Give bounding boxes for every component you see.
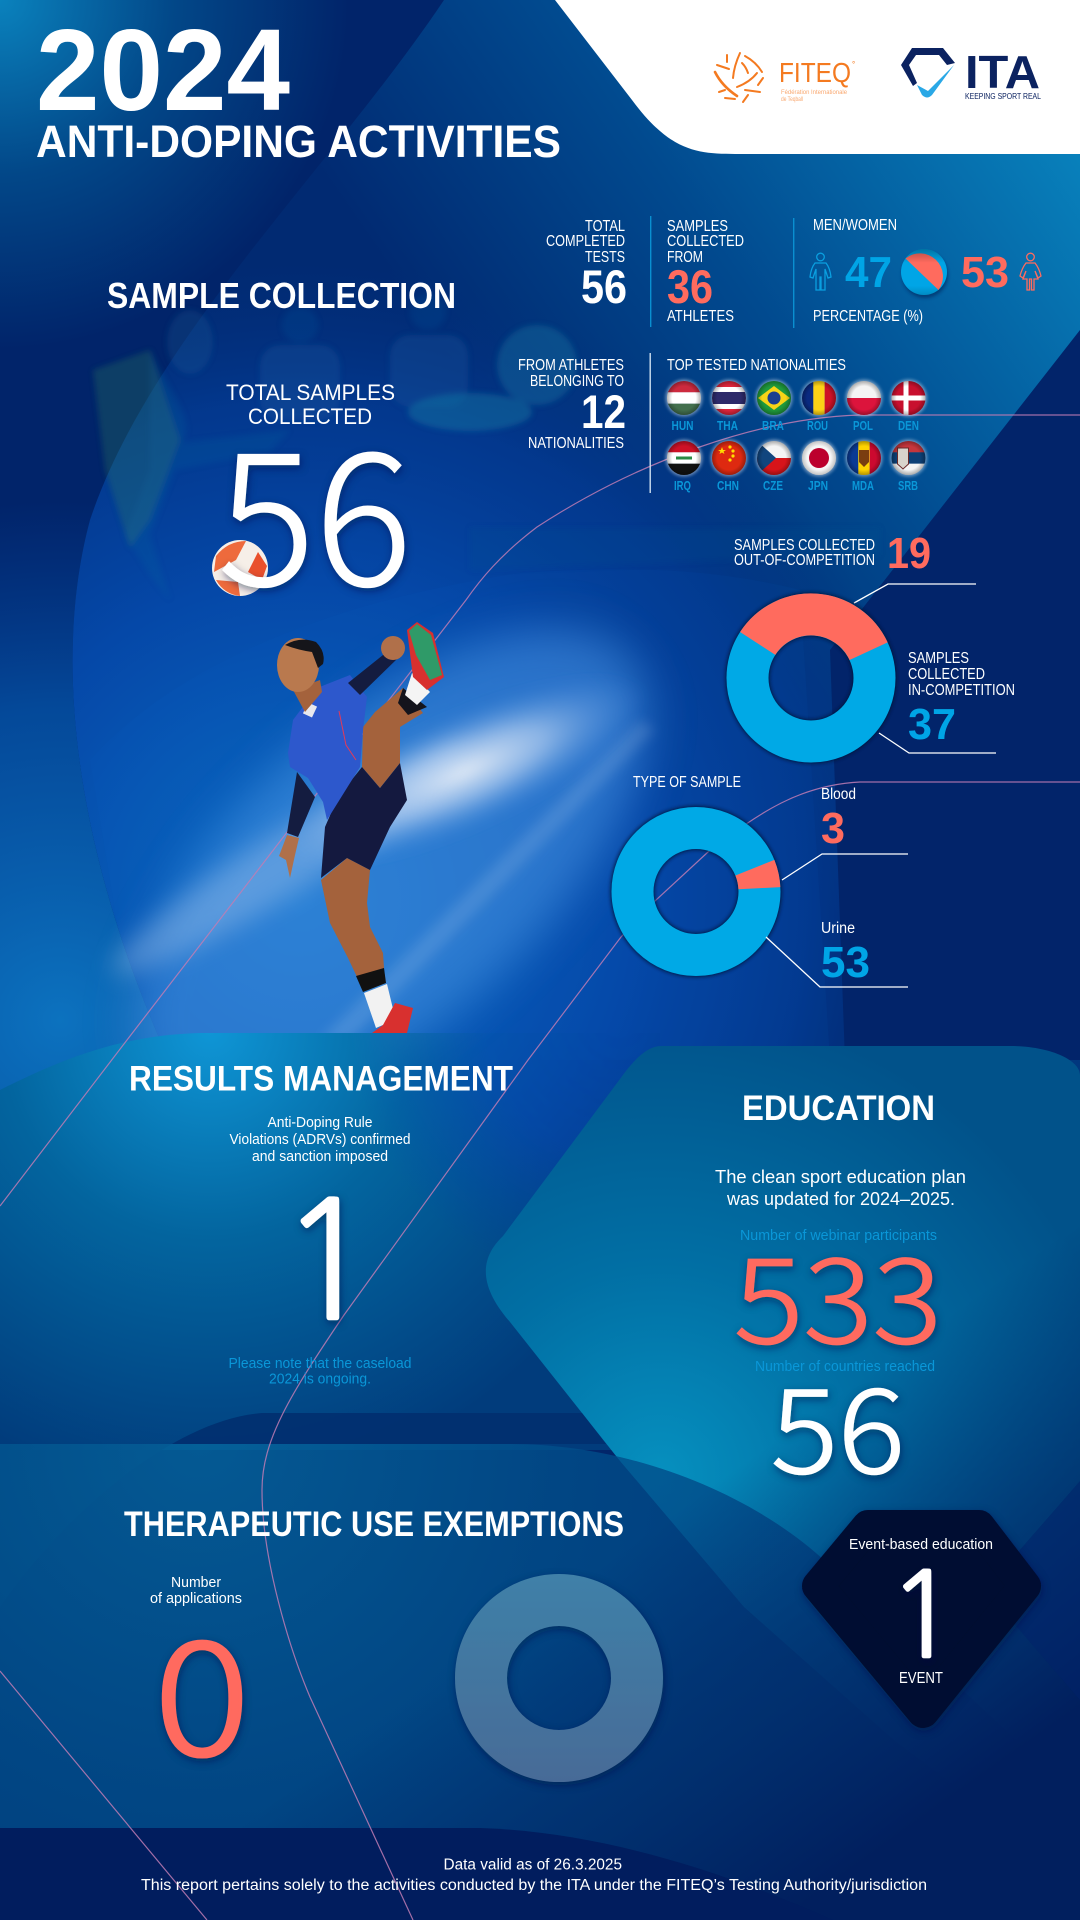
- callout: event-based education: Event-based education: [849, 1537, 993, 1553]
- therapeutic use exemptions panel background: [0, 1444, 1080, 1920]
- logo: ITA: KEEPING SPORT REAL: [965, 92, 1041, 101]
- footer note: Data valid as of 26.3.2025: [444, 1856, 622, 1874]
- icon: man: [810, 253, 831, 290]
- icon: woman: [1020, 253, 1041, 290]
- total samples collected: 56: [218, 372, 412, 638]
- text: education plan: The clean sport education plan: [715, 1166, 966, 1187]
- text: number of applications: of applications: [150, 1591, 242, 1607]
- logo: FITEQ: [715, 53, 855, 103]
- flag: Hungary: [666, 380, 702, 416]
- total samples collected: COLLECTED: [248, 404, 372, 429]
- header white corner: [555, 0, 1080, 154]
- text: ADRV description: and sanction imposed: [252, 1149, 388, 1165]
- stat: samples collected from athletes: [650, 216, 744, 327]
- callout: urine: [766, 920, 908, 987]
- callout: event-based education: 1: [887, 1556, 959, 1674]
- decorative pink curves: [0, 415, 1080, 1920]
- number: countries reached: 56: [771, 1337, 905, 1507]
- label: webinar participants: Number of webinar participants: [740, 1228, 937, 1244]
- text: education plan: [715, 1166, 966, 1209]
- stat: total completed tests: TOTAL: [585, 218, 625, 235]
- footer note: [141, 1856, 927, 1894]
- stat: nationalities count: 12: [581, 385, 626, 438]
- stat: samples collected from athletes: SAMPLES: [667, 218, 728, 235]
- stat: total completed tests: [546, 218, 627, 313]
- stat: samples collected from athletes: COLLECTED: [667, 233, 744, 250]
- faded background photo of players: [93, 294, 880, 600]
- flag: Japan: [800, 440, 838, 476]
- flag: Serbia: [890, 440, 927, 476]
- callout: blood: 3: [821, 804, 845, 853]
- stat: nationalities count: NATIONALITIES: [528, 435, 624, 452]
- heading: sample collection: SAMPLE COLLECTION: [107, 275, 456, 316]
- flag labels row two: CZE: [763, 479, 783, 493]
- flag labels row one: ROU: [807, 419, 828, 433]
- logo: FITEQ: °: [852, 60, 855, 69]
- title: ANTI-DOPING ACTIVITIES: [36, 116, 561, 167]
- footer note: This report pertains solely to the activities conducted by the ITA under the FITEQ’s Testing Authority/jurisdiction: [141, 1877, 927, 1894]
- flag labels row one: BRA: [762, 419, 784, 433]
- total samples collected: TOTAL SAMPLES: [226, 380, 395, 405]
- icon: teqball ball: [212, 540, 268, 596]
- flag labels row two: IRQ: [674, 479, 691, 493]
- flag labels row one: THA: [717, 419, 738, 433]
- note: caseload: [228, 1356, 412, 1388]
- label: countries reached: Number of countries reached: [755, 1359, 935, 1375]
- flag: Thailand: [710, 380, 748, 416]
- note: caseload: Please note that the caseload: [228, 1356, 412, 1372]
- stat: men and women percentage: [793, 217, 1041, 328]
- stat: nationalities count: FROM ATHLETES: [518, 357, 624, 374]
- stat: total completed tests: COMPLETED: [546, 233, 625, 250]
- callout: samples in competition: [879, 650, 1015, 753]
- flag: Czechia: [756, 440, 792, 476]
- text: education plan: was updated for 2024–2025.: [726, 1188, 955, 1209]
- text: number of applications: [150, 1575, 242, 1607]
- stat: nationalities count: [518, 357, 626, 452]
- callout: samples out of competition: 19: [887, 529, 931, 578]
- stat: men and women percentage: PERCENTAGE (%): [813, 308, 923, 325]
- stat: samples collected from athletes: 36: [667, 260, 713, 313]
- heading: therapeutic use exemptions: THERAPEUTIC USE EXEMPTIONS: [124, 1505, 624, 1544]
- logo: FITEQ: de Teqball: [781, 96, 803, 103]
- number: applications: 0: [154, 1572, 250, 1801]
- panel: education: [715, 1089, 966, 1507]
- flag labels row two: CHN: [717, 479, 739, 493]
- number: ADRV count: 1: [278, 1179, 377, 1343]
- results management panel background: [0, 1033, 660, 1450]
- stat: samples collected from athletes: ATHLETES: [667, 308, 734, 325]
- sleeves: [348, 655, 398, 695]
- donut chart: in and out of competition: [748, 614, 874, 742]
- number: webinar participants: 533: [734, 1206, 942, 1377]
- callout: urine: 53: [821, 938, 870, 987]
- callout: blood: Blood: [821, 786, 856, 803]
- callout: samples in competition: SAMPLES: [908, 650, 969, 667]
- flag labels row two: JPN: [808, 479, 828, 493]
- flag labels row two: [674, 479, 918, 493]
- pie: men women split: [901, 249, 948, 298]
- note: caseload: 2024 is ongoing.: [269, 1372, 371, 1388]
- callout: samples in competition: 37: [908, 700, 956, 749]
- logo: FITEQ: FITEQ: [779, 57, 851, 88]
- flag: Moldova: [846, 440, 882, 476]
- hands: [381, 636, 405, 660]
- donut chart: type of sample: [632, 828, 760, 955]
- flag labels row one: [672, 419, 919, 433]
- stat: men and women percentage: MEN/WOMEN: [813, 217, 897, 234]
- panel: top tested nationalities: TOP TESTED NATIONALITIES: [667, 357, 846, 374]
- callout: event-based education: [818, 1526, 1025, 1712]
- callout: samples out of competition: [734, 529, 976, 603]
- stat: samples collected from athletes: FROM: [667, 249, 703, 266]
- flag labels row one: HUN: [672, 419, 694, 433]
- panel: therapeutic use exemptions: [124, 1505, 637, 1801]
- jersey: [288, 675, 367, 820]
- logo: ITA: [901, 46, 1041, 101]
- flag labels row two: MDA: [852, 479, 874, 493]
- raised leg: [362, 688, 423, 788]
- callout: samples out of competition: SAMPLES COLLECTED: [734, 537, 875, 554]
- footer band: [0, 1828, 833, 1920]
- flag: Iraq: [666, 440, 702, 476]
- flag labels row one: DEN: [898, 419, 919, 433]
- text: ADRV description: [230, 1115, 410, 1165]
- education panel background: [486, 1046, 1080, 1880]
- stat: total completed tests: 56: [581, 260, 627, 313]
- lower right shading: [108, 1221, 1080, 1920]
- callout: blood: [782, 786, 908, 880]
- logo: FITEQ: Fédération Internationale: [781, 89, 847, 96]
- callout: event-based education: EVENT: [899, 1670, 943, 1687]
- panel: top tested nationalities: [650, 353, 927, 493]
- label: type of sample: TYPE OF SAMPLE: [633, 774, 741, 791]
- standing leg: [321, 858, 384, 977]
- stat: nationalities count: BELONGING TO: [530, 373, 624, 390]
- text: number of applications: Number: [171, 1575, 221, 1591]
- callout: samples out of competition: OUT-OF-COMPETITION: [734, 552, 875, 569]
- stat: total completed tests: TESTS: [585, 249, 625, 266]
- flag: Romania: [800, 380, 838, 416]
- athlete: [277, 622, 444, 1033]
- panel: results management: [129, 1060, 513, 1388]
- flag labels row two: SRB: [898, 479, 918, 493]
- donut chart: empty: [481, 1600, 637, 1756]
- flag: Brazil: [756, 380, 792, 416]
- shorts: [321, 763, 407, 878]
- text: ADRV description: Anti-Doping Rule: [268, 1115, 372, 1131]
- flag: Denmark: [890, 380, 927, 416]
- therapeutic use exemptions dark arch: [0, 1413, 606, 1607]
- stat: men and women percentage: 53: [961, 248, 1009, 297]
- title: [36, 5, 561, 167]
- flag: China: [710, 440, 748, 476]
- text: ADRV description: Violations (ADRVs) confirmed: [230, 1132, 410, 1148]
- neck and head: [293, 680, 322, 712]
- flag: Poland: [846, 380, 882, 416]
- callout: urine: Urine: [821, 920, 855, 937]
- stat: men and women percentage: 47: [845, 248, 892, 297]
- heading: results management: RESULTS MANAGEMENT: [129, 1060, 513, 1098]
- logo: ITA: ITA: [965, 46, 1040, 98]
- heading: education: EDUCATION: [742, 1089, 935, 1128]
- callout: samples in competition: COLLECTED: [908, 666, 985, 683]
- callout: samples in competition: IN-COMPETITION: [908, 682, 1015, 699]
- flag labels row one: POL: [853, 419, 873, 433]
- title: 2024: [36, 5, 290, 135]
